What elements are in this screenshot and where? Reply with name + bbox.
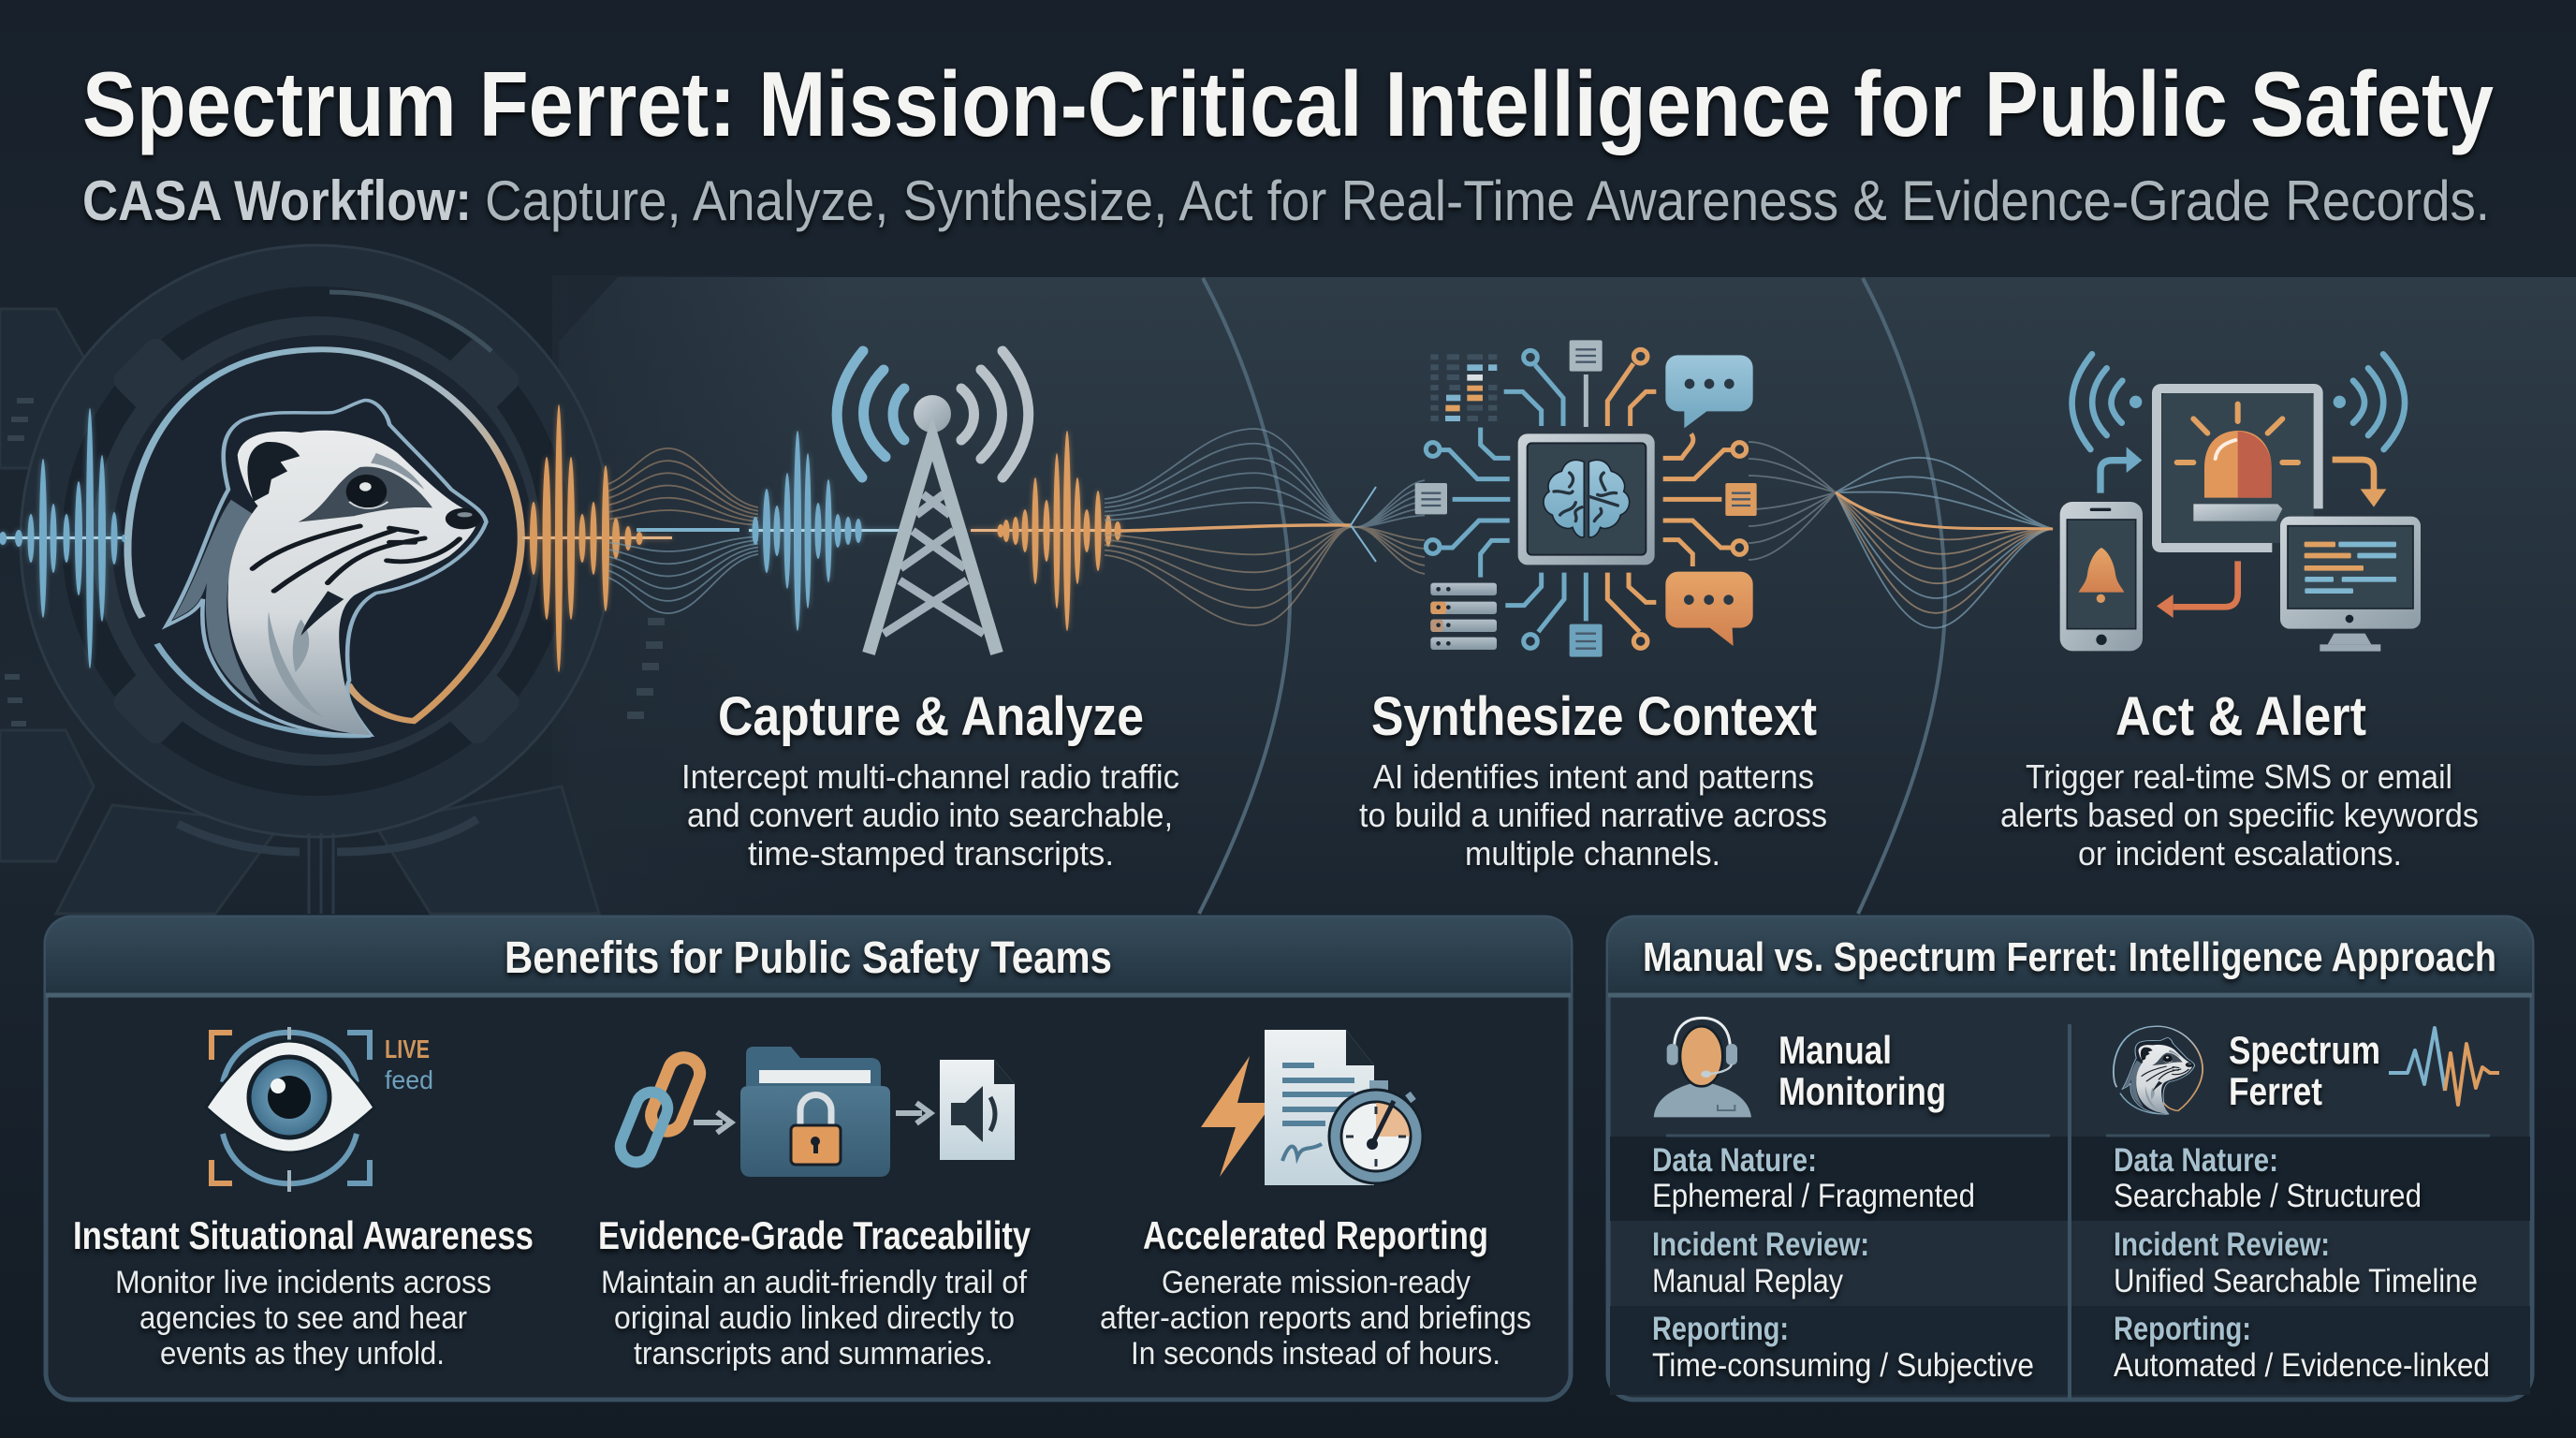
benefit: evidence-grade traceability xyxy=(598,1213,1032,1372)
benefit: accelerated reporting: Generate mission-ready xyxy=(1162,1265,1471,1300)
benefit: instant situational awareness: agencies to see and hear xyxy=(139,1300,467,1336)
benefit: evidence-grade traceability: original audio linked directly to xyxy=(614,1300,1015,1336)
waveform: left orange xyxy=(522,404,672,672)
section: capture and analyze: Capture & Analyze xyxy=(718,686,1144,747)
column: spectrum ferret data: Data Nature: xyxy=(2114,1142,2278,1179)
section: act and alert: Trigger real-time SMS or email xyxy=(2026,757,2452,796)
icon: radio tower xyxy=(837,351,1029,653)
section: act and alert: or incident escalations. xyxy=(2078,834,2402,873)
signal strands: brain to alert xyxy=(1351,442,2053,648)
column: manual monitoring data: Incident Review: xyxy=(1652,1226,1869,1263)
column: spectrum ferret data: Unified Searchable Timeline xyxy=(2114,1263,2478,1299)
column: manual monitoring data xyxy=(1652,1142,2034,1384)
section: capture and analyze: Intercept multi-channel radio traffic xyxy=(681,757,1179,796)
column: spectrum ferret data: Automated / Evidence-linked xyxy=(2114,1347,2490,1384)
benefit: instant situational awareness: events as they unfold. xyxy=(160,1336,445,1372)
header band xyxy=(559,277,2576,914)
benefit: evidence-grade traceability: Evidence-Grade Traceability xyxy=(598,1213,1032,1257)
section: act and alert: Act & Alert xyxy=(2115,686,2366,747)
panel: comparison xyxy=(1608,917,2532,1400)
icon: AI chip xyxy=(1415,340,1757,657)
icon: report, lightning, stopwatch xyxy=(1201,1030,1423,1185)
benefit: instant situational awareness: Instant Situational Awareness xyxy=(73,1213,534,1257)
waveform: tower left blue xyxy=(749,431,899,631)
section: act and alert xyxy=(2000,686,2479,873)
benefit: accelerated reporting xyxy=(1100,1213,1531,1372)
column: manual monitoring data: Manual Replay xyxy=(1652,1263,1843,1299)
section: synthesize context: Synthesize Context xyxy=(1371,686,1817,747)
section: capture and analyze: and convert audio into searchable, xyxy=(687,796,1173,834)
heading: manual monitoring xyxy=(1778,1028,1946,1113)
heading: benefits: Benefits for Public Safety Teams xyxy=(505,933,1112,983)
section: synthesize context: multiple channels. xyxy=(1465,834,1720,873)
icon: chain, locked folder, audio file xyxy=(616,1047,1015,1177)
waveform: tower right orange xyxy=(971,431,1121,631)
heading: manual monitoring: Monitoring xyxy=(1778,1069,1946,1113)
benefit: evidence-grade traceability: Maintain an audit-friendly trail of xyxy=(601,1265,1028,1300)
benefit: evidence-grade traceability: transcripts and summaries. xyxy=(634,1336,993,1372)
column: manual monitoring data: Data Nature: xyxy=(1652,1142,1817,1179)
waveform: left blue xyxy=(0,408,126,668)
heading: spectrum ferret: Ferret xyxy=(2229,1069,2322,1113)
column: spectrum ferret data: Searchable / Structured xyxy=(2114,1178,2422,1214)
signal strands: tower to brain xyxy=(1105,429,1425,625)
heading: spectrum ferret xyxy=(2229,1028,2380,1113)
subtitle: CASA Workflow: xyxy=(82,169,472,232)
benefit: instant situational awareness: Monitor live incidents across xyxy=(115,1265,491,1300)
icon: eye: feed xyxy=(385,1065,433,1094)
benefit: accelerated reporting: In seconds instead of hours. xyxy=(1131,1336,1500,1372)
column: spectrum ferret data: Reporting: xyxy=(2114,1311,2251,1347)
section: act and alert: alerts based on specific keywords xyxy=(2000,796,2479,834)
heading: manual monitoring: Manual xyxy=(1778,1028,1892,1072)
benefit: accelerated reporting: after-action reports and briefings xyxy=(1100,1300,1531,1336)
column: manual monitoring data: Time-consuming / Subjective xyxy=(1652,1347,2034,1384)
panel: benefits xyxy=(46,917,1571,1400)
section: capture and analyze: time-stamped transcripts. xyxy=(748,834,1114,873)
icon: eye xyxy=(206,1027,433,1192)
column: manual monitoring data: Reporting: xyxy=(1652,1311,1789,1347)
icon: pulse line xyxy=(2389,1028,2499,1105)
icon: eye: LIVE xyxy=(385,1034,430,1064)
section: capture and analyze xyxy=(681,686,1179,873)
curved section dividers xyxy=(1199,278,1945,914)
icon: mini ferret logo xyxy=(2114,1026,2203,1114)
column: spectrum ferret data xyxy=(2114,1142,2490,1384)
heading: spectrum ferret: Spectrum xyxy=(2229,1028,2380,1072)
benefit: accelerated reporting: Accelerated Reporting xyxy=(1143,1213,1488,1257)
icon: operator with headset xyxy=(1654,1018,1751,1117)
section: synthesize context: AI identifies intent and patterns xyxy=(1373,757,1814,796)
section: synthesize context: to build a unified narrative across xyxy=(1359,796,1827,834)
column: spectrum ferret data: Incident Review: xyxy=(2114,1226,2330,1263)
signal strands: ferret to tower xyxy=(608,448,758,613)
icon: alert devices xyxy=(2060,354,2421,652)
section: synthesize context xyxy=(1359,686,1827,873)
gear backdrop xyxy=(0,245,665,914)
logo: ferret xyxy=(127,349,521,736)
benefit: instant situational awareness xyxy=(73,1213,534,1372)
column: manual monitoring data: Ephemeral / Fragmented xyxy=(1652,1178,1975,1214)
